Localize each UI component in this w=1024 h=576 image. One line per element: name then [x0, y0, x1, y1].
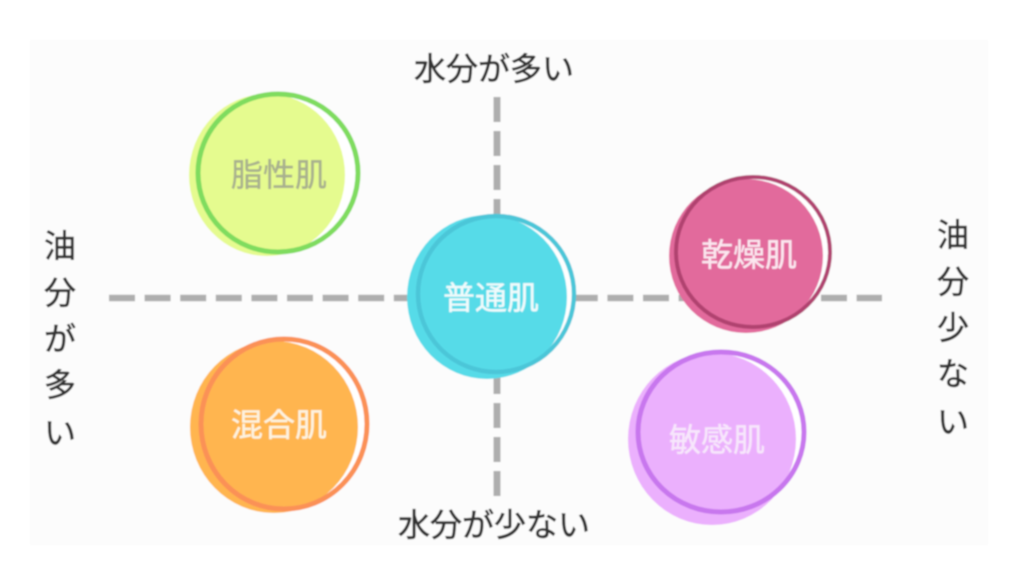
axis label: left: が [44, 321, 76, 357]
axis label: top: 水分が多い [414, 51, 574, 87]
vertical axis [494, 97, 500, 498]
axis label: right: 分 [937, 264, 969, 300]
axis label: right: 油 [937, 217, 969, 253]
axis label: right: な [937, 356, 969, 392]
circle: sensitive skin [628, 352, 804, 525]
axis label: right: い [937, 404, 969, 440]
circle: normal skin [407, 215, 574, 379]
axis label: left: い [44, 415, 76, 451]
axis label: left: 分 [44, 275, 76, 311]
circle: oily skin: 脂性肌 [231, 157, 327, 193]
horizontal axis [109, 295, 882, 301]
circle: combination skin: 混合肌 [231, 407, 327, 443]
axis label: left [44, 228, 76, 451]
circle: dry skin [669, 177, 830, 333]
axis label: right [937, 217, 969, 440]
axis label: right: 少 [937, 310, 969, 346]
axis label: left: 油 [44, 228, 76, 264]
circle: oily skin [189, 94, 358, 256]
axis label: bottom: 水分が少ない [398, 507, 590, 543]
circle: sensitive skin: 敏感肌 [669, 422, 765, 458]
circle: dry skin: 乾燥肌 [701, 237, 797, 273]
circle: normal skin: 普通肌 [443, 280, 539, 316]
axis label: left: 多 [44, 367, 76, 403]
circle: combination skin [190, 339, 367, 513]
